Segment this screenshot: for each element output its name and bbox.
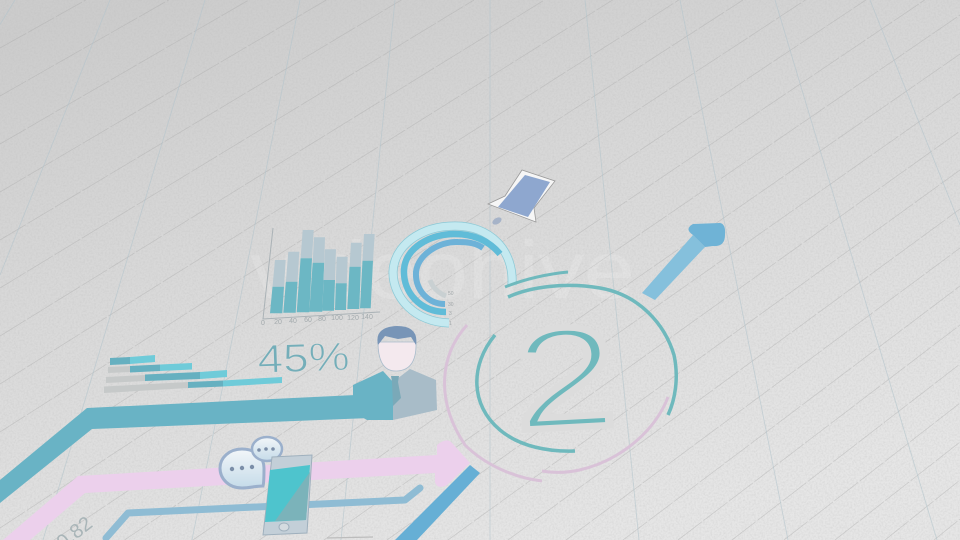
icon: smartphone [263,455,312,535]
thin blue connector [106,488,420,538]
face [378,342,416,371]
chart axis labels: 120 [347,315,359,322]
lower faint line [327,537,373,538]
circled number 2 [445,272,676,481]
icon: tablet on stand [488,170,555,226]
icon: small chat bubble [252,437,282,461]
ring labels: 1 [449,321,452,327]
bar chart [261,228,380,327]
hair [377,326,416,345]
outer teal arc [508,285,676,415]
pink arrow connector [3,440,470,540]
chart axis labels: 20 [274,319,282,326]
arrow: blue upward arrow [642,223,725,300]
chart axis labels: 140 [361,314,373,321]
watermark: videohive [250,225,635,316]
suit [353,369,437,420]
blue diagonal bar [395,465,480,540]
progress bars [104,355,282,393]
short teal stroke [505,272,568,287]
chart axis labels: 80 [318,316,326,323]
pink lower arc [542,397,668,472]
ring labels: 50 [448,291,454,297]
pink outer arc [445,325,542,481]
ring labels: 30 [448,302,454,308]
chart bars [270,230,375,313]
chart axis labels: 0 [261,320,265,327]
chart axis labels [261,314,373,327]
ring labels: 3 [449,311,452,317]
number: 2 [510,295,620,460]
chart axis labels: 100 [331,315,343,322]
chart axes [263,228,380,319]
chart axis labels: 60 [304,317,312,324]
ring labels [448,291,454,327]
radial ring chart [393,226,512,327]
icon: person in suit [353,326,437,420]
thick teal connector to person [0,395,370,503]
icon: large chat bubble [220,449,264,488]
inner teal arc [477,335,575,451]
chart axis labels: 40 [289,318,297,325]
percentage label: 45% [257,335,350,382]
